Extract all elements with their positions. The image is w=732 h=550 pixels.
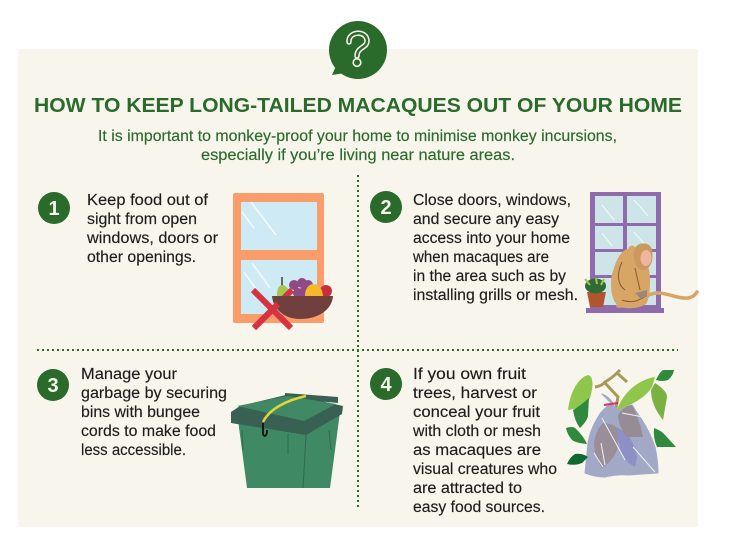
step 4 number: 4 <box>380 374 392 396</box>
subtitle: It is important to monkey-proof your home to minimise monkey incursions, <box>98 128 617 145</box>
step 4 text: visual creatures who <box>413 461 557 478</box>
subtitle: especially if you’re living near nature areas. <box>201 147 515 164</box>
step 1 text: Keep food out of <box>87 192 209 209</box>
step 1 text: sight from open <box>87 211 197 228</box>
step 1 number: 1 <box>48 198 60 220</box>
step 3 text: Manage your <box>81 366 177 383</box>
step 1 text: windows, doors or <box>86 230 218 247</box>
step 3 number <box>37 369 69 401</box>
icon: bagged fruit on branch <box>566 370 676 477</box>
icon: question speech bubble <box>329 21 387 79</box>
step 1 text: other openings. <box>87 249 196 266</box>
step 4 text: conceal your fruit <box>413 404 541 421</box>
step 1 text <box>86 192 218 266</box>
step 2 text: access into your home <box>413 230 570 247</box>
subtitle <box>98 128 617 164</box>
step 2 number: 2 <box>380 197 392 219</box>
icon: green bin <box>231 393 343 488</box>
icon: window with fruit bowl <box>233 193 333 328</box>
step 2 text <box>412 192 578 304</box>
icon: monkey at window <box>585 192 697 313</box>
step 4 text: easy food sources. <box>413 499 545 516</box>
title: HOW TO KEEP LONG-TAILED MACAQUES OUT OF YOUR HOME <box>34 95 682 117</box>
step 4 text: If you own fruit <box>413 366 527 383</box>
step 3 number: 3 <box>47 375 59 397</box>
dividers <box>37 175 678 510</box>
step 4 text <box>412 366 557 516</box>
step 4 number <box>370 368 402 400</box>
step 2 number <box>370 191 402 223</box>
step 4 text: are attracted to <box>413 480 522 497</box>
step 2 text: and secure any easy <box>413 211 559 228</box>
step 4 text: as macaques are <box>413 442 541 459</box>
step 3 text: less accessible. <box>81 442 186 459</box>
step 1 number <box>38 192 70 224</box>
step 2 text: installing grills or mesh. <box>413 287 578 304</box>
step 2 text: Close doors, windows, <box>413 192 571 209</box>
step 4 text: trees, harvest or <box>413 385 537 402</box>
step 2 text: in the area such as by <box>413 268 566 285</box>
step 3 text: garbage by securing <box>81 385 227 402</box>
step 4 text: with cloth or mesh <box>412 423 541 440</box>
step 2 text: when macaques are <box>412 249 549 266</box>
step 3 text: bins with bungee <box>81 404 200 421</box>
step 3 text <box>81 366 227 459</box>
step 3 text: cords to make food <box>81 423 216 440</box>
